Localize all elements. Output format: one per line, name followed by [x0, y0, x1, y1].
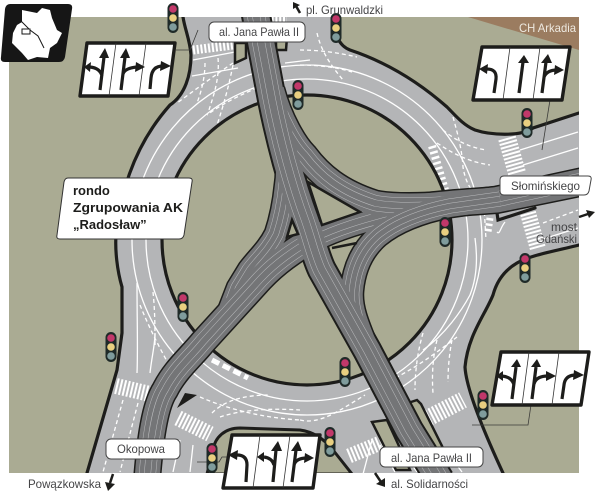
traffic lights [106, 3, 532, 473]
label: Okopowa [106, 439, 180, 459]
label: al. Jana Pawła II bottom: al. Jana Pawła II [391, 451, 472, 465]
road edges [87, 17, 579, 474]
label: rondo Zgrupowania AK Radosław: rondo [73, 183, 110, 198]
lane sign: top left [80, 43, 175, 96]
label: al. Jana Pawła II top [209, 22, 305, 42]
direction: pl. Grunwaldzki: pl. Grunwaldzki [306, 3, 383, 17]
label: al. Jana Pawła II bottom [380, 447, 483, 467]
arrows [84, 48, 171, 90]
lane sign: top right [473, 47, 570, 100]
direction: al. Solidarności [375, 473, 468, 491]
ring lane markings [103, 33, 578, 478]
lane sign: bottom [223, 435, 320, 488]
label: most Gdański: most [551, 220, 578, 234]
flyover islands [287, 182, 360, 248]
arrows [496, 359, 584, 399]
direction: Powązkowska: Powązkowska [28, 477, 101, 491]
flyover lanes [147, 10, 585, 480]
connector lines [176, 30, 550, 462]
CH Arkadia plot [468, 17, 579, 50]
label: Słomińskiego [500, 176, 591, 195]
label: most Gdański [536, 220, 578, 246]
flyover casing [147, 10, 585, 480]
label: rondo Zgrupowania AK Radosław: „Radosław” [73, 217, 147, 232]
label: CH Arkadia: CH Arkadia [519, 21, 576, 35]
label: Słomińskiego: Słomińskiego [511, 179, 580, 193]
direction: most Gdański arrow [579, 210, 595, 218]
pedestrian crossings [116, 21, 538, 456]
hatched islands [212, 146, 490, 378]
arrows [228, 441, 314, 482]
lane sign: lower right [492, 352, 589, 405]
ring road and arms [87, 17, 579, 473]
label: most Gdański: Gdański [536, 232, 577, 246]
locator map icon [1, 4, 72, 62]
label: rondo Zgrupowania AK Radosław: Zgrupowania AK [73, 200, 184, 215]
arrows [479, 54, 564, 93]
label: Okopowa: Okopowa [117, 442, 165, 456]
direction: al. Solidarności: al. Solidarności [391, 477, 468, 491]
label: rondo Zgrupowania AK Radosław [57, 178, 192, 239]
label: al. Jana Pawła II top: al. Jana Pawła II [219, 25, 299, 39]
city outline [12, 8, 62, 60]
central island [162, 95, 452, 385]
